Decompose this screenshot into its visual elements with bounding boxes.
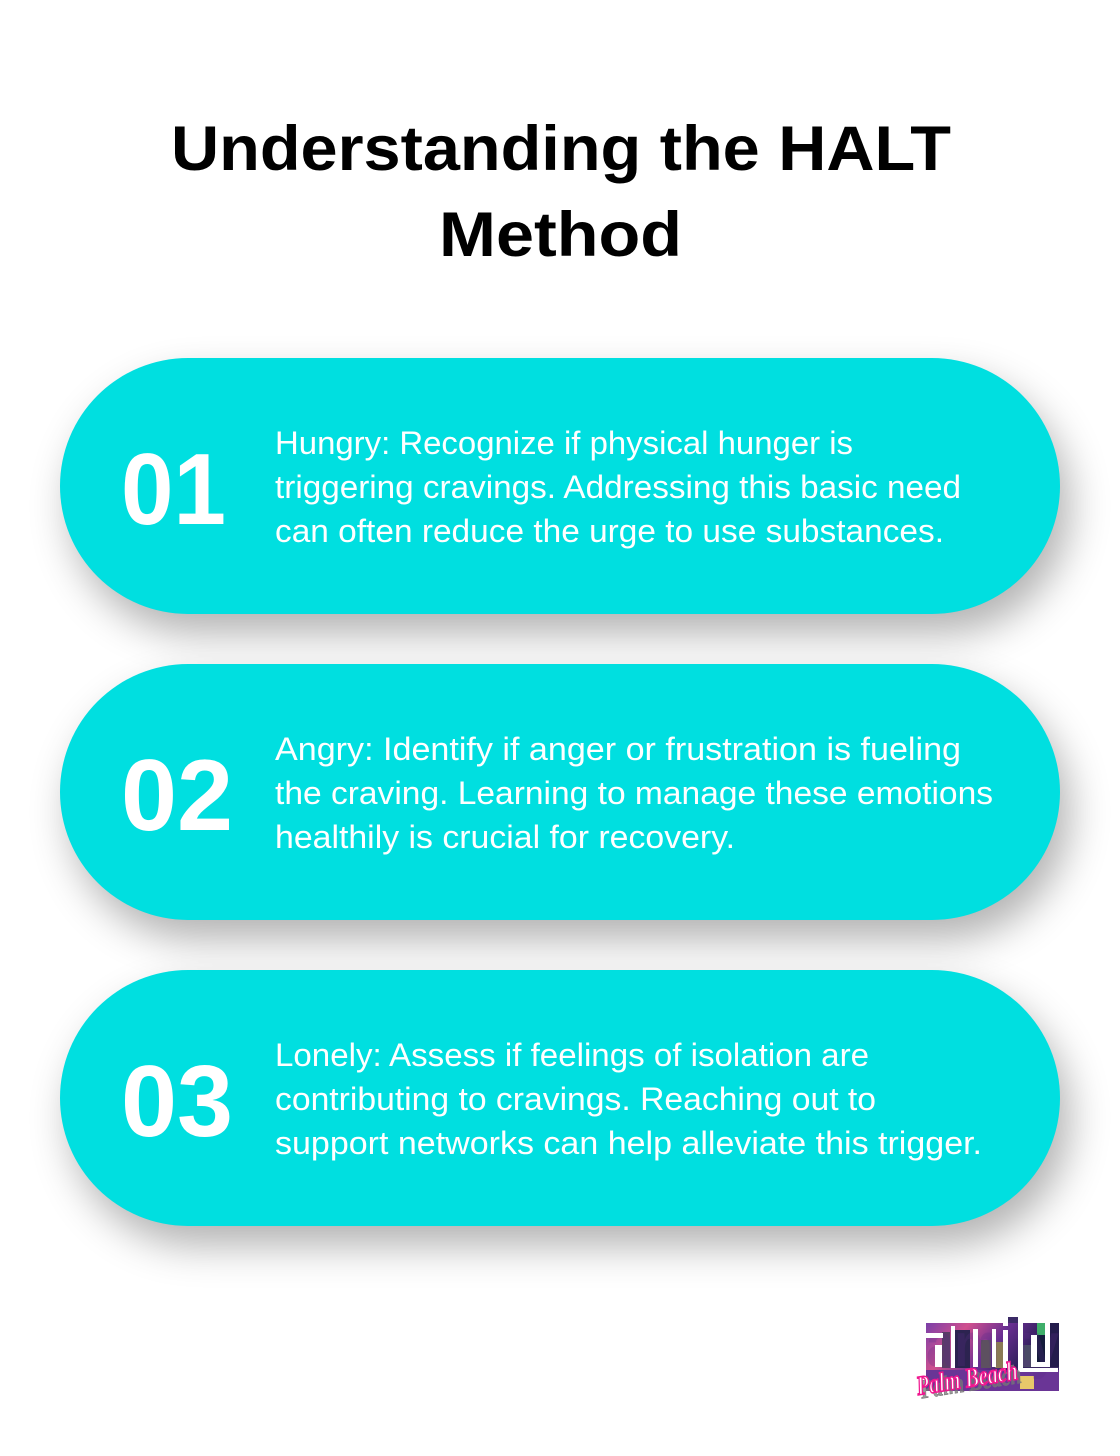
step 03 text: Lonely: Assess if feelings of isolation are [275,1037,869,1073]
step 03 text: contributing to cravings. Reaching out to [275,1081,876,1117]
logo scene [926,1317,1059,1391]
step 01 text: can often reduce the urge to use substances. [275,513,944,549]
step 01 number: 01 [121,434,226,546]
panel: step 03 pill [60,970,1060,1226]
step 02 text: Angry: Identify if anger or frustration is fueling [275,731,961,767]
step 01 text: triggering cravings. Addressing this basic need [275,469,961,505]
step 02 number: 02 [121,740,233,852]
title: Understanding the HALT [171,114,951,184]
panel: step 01 pill [60,358,1060,614]
step 02 text: the craving. Learning to manage these emotions [275,775,993,811]
title [171,114,951,270]
step 02 text [275,731,993,855]
logo script: Palm Beach [914,1355,1020,1401]
step 03 text: support networks can help alleviate this trigger. [275,1125,982,1161]
step 03 number: 03 [121,1046,233,1158]
step 02 text: healthily is crucial for recovery. [275,819,735,855]
logo cut lines [926,1317,1058,1372]
title: Method [439,200,682,270]
step 01 text [275,425,961,549]
step 03 text [275,1037,982,1161]
step 01 text: Hungry: Recognize if physical hunger is [275,425,853,461]
panel: step 02 pill [60,664,1060,920]
logo: amity Palm Beach [914,1311,1059,1405]
logo wordmark: amity [926,1311,1059,1380]
logo script: Palm Beach [917,1359,1023,1405]
